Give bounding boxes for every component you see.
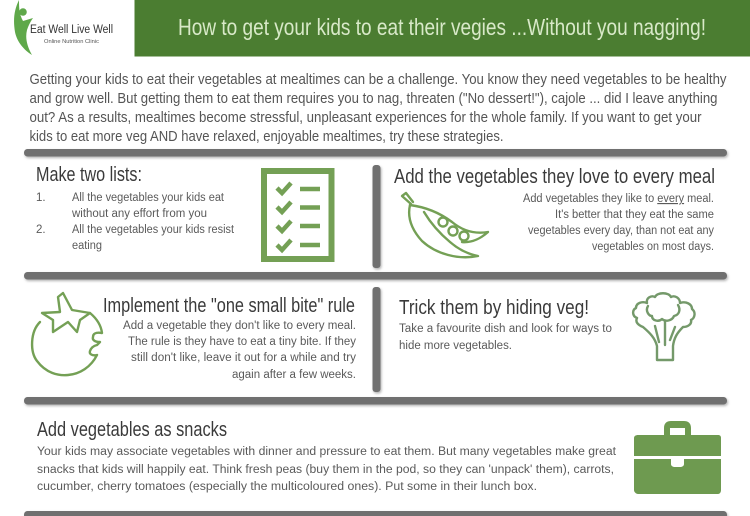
numbered list: without any effort from you: [71, 208, 207, 220]
body text: It's better that they eat the same: [555, 209, 714, 221]
panel: one small bite rule: [32, 293, 356, 381]
body text: Add a vegetable they don't like to every meal.: [123, 320, 356, 332]
heading: Trick them by hiding veg!: [399, 297, 589, 319]
panel: trick them by hiding veg: hide more vegetables.: [399, 340, 512, 352]
icon: broccoli: [633, 293, 695, 360]
body text: again after a few weeks.: [232, 369, 356, 381]
body text: vegetables every day, than not eat any: [528, 225, 714, 237]
logo: [14, 0, 113, 55]
title banner: [134, 0, 750, 56]
body text: Add vegetables they like to every meal.: [523, 193, 714, 205]
numbered list: 1.: [36, 192, 46, 204]
icon: lunch box: [634, 421, 721, 494]
numbered list: eating: [72, 240, 102, 252]
numbered list: [36, 192, 235, 252]
panel: add vegetables as snacks: cucumber, cherry tomatoes (especially the multicoloured ones). Put some in their lunch box.: [37, 481, 537, 493]
body text: [523, 193, 714, 253]
numbered list: All the vegetables your kids resist: [72, 224, 235, 236]
body text: vegetables on most days.: [592, 241, 714, 253]
logo subtitle: Online Nutrition Clinic: [44, 39, 99, 45]
intro paragraph: out? As a results, mealtimes become stressful, unpleasant experiences for the whole family. If you want to get your: [30, 110, 702, 126]
intro paragraph: kids to eat more veg AND have relaxed, enjoyable mealtimes, try these strategies.: [30, 129, 504, 145]
heading: Implement the "one small bite" rule: [103, 295, 355, 317]
divider bars: [24, 149, 727, 516]
numbered list: All the vegetables your kids eat: [72, 192, 225, 204]
icon: logo figure: [14, 0, 33, 55]
heading: Make two lists:: [36, 164, 142, 186]
body text: The rule is they have to eat a tiny bite. If they: [128, 336, 356, 348]
logo text: Eat Well Live Well: [30, 24, 113, 36]
panel: add vegetables they love: [394, 166, 715, 257]
panel: add vegetables as snacks: snacks that kids will happily eat. Think fresh peas (buy them in the pod, so they can 'unpack' them), carrots,: [37, 464, 614, 476]
intro paragraph: [30, 72, 727, 145]
icon: pea pod: [402, 193, 488, 257]
body text: Take a favourite dish and look for ways to: [399, 323, 612, 335]
panel: trick them by hiding veg: [399, 293, 695, 360]
numbered list: 2.: [36, 224, 46, 236]
body text: still don't like, leave it out for a while and try: [131, 352, 356, 364]
icon: bitten tomato: [32, 293, 102, 375]
heading: Add vegetables as snacks: [37, 419, 227, 441]
body text: [123, 320, 356, 381]
panel: make two lists: [36, 164, 332, 259]
icon: checklist: [264, 171, 332, 259]
panel: add vegetables as snacks: [37, 419, 721, 494]
body text: Your kids may associate vegetables with dinner and pressure to eat them. But many vegetables make great: [37, 446, 617, 458]
